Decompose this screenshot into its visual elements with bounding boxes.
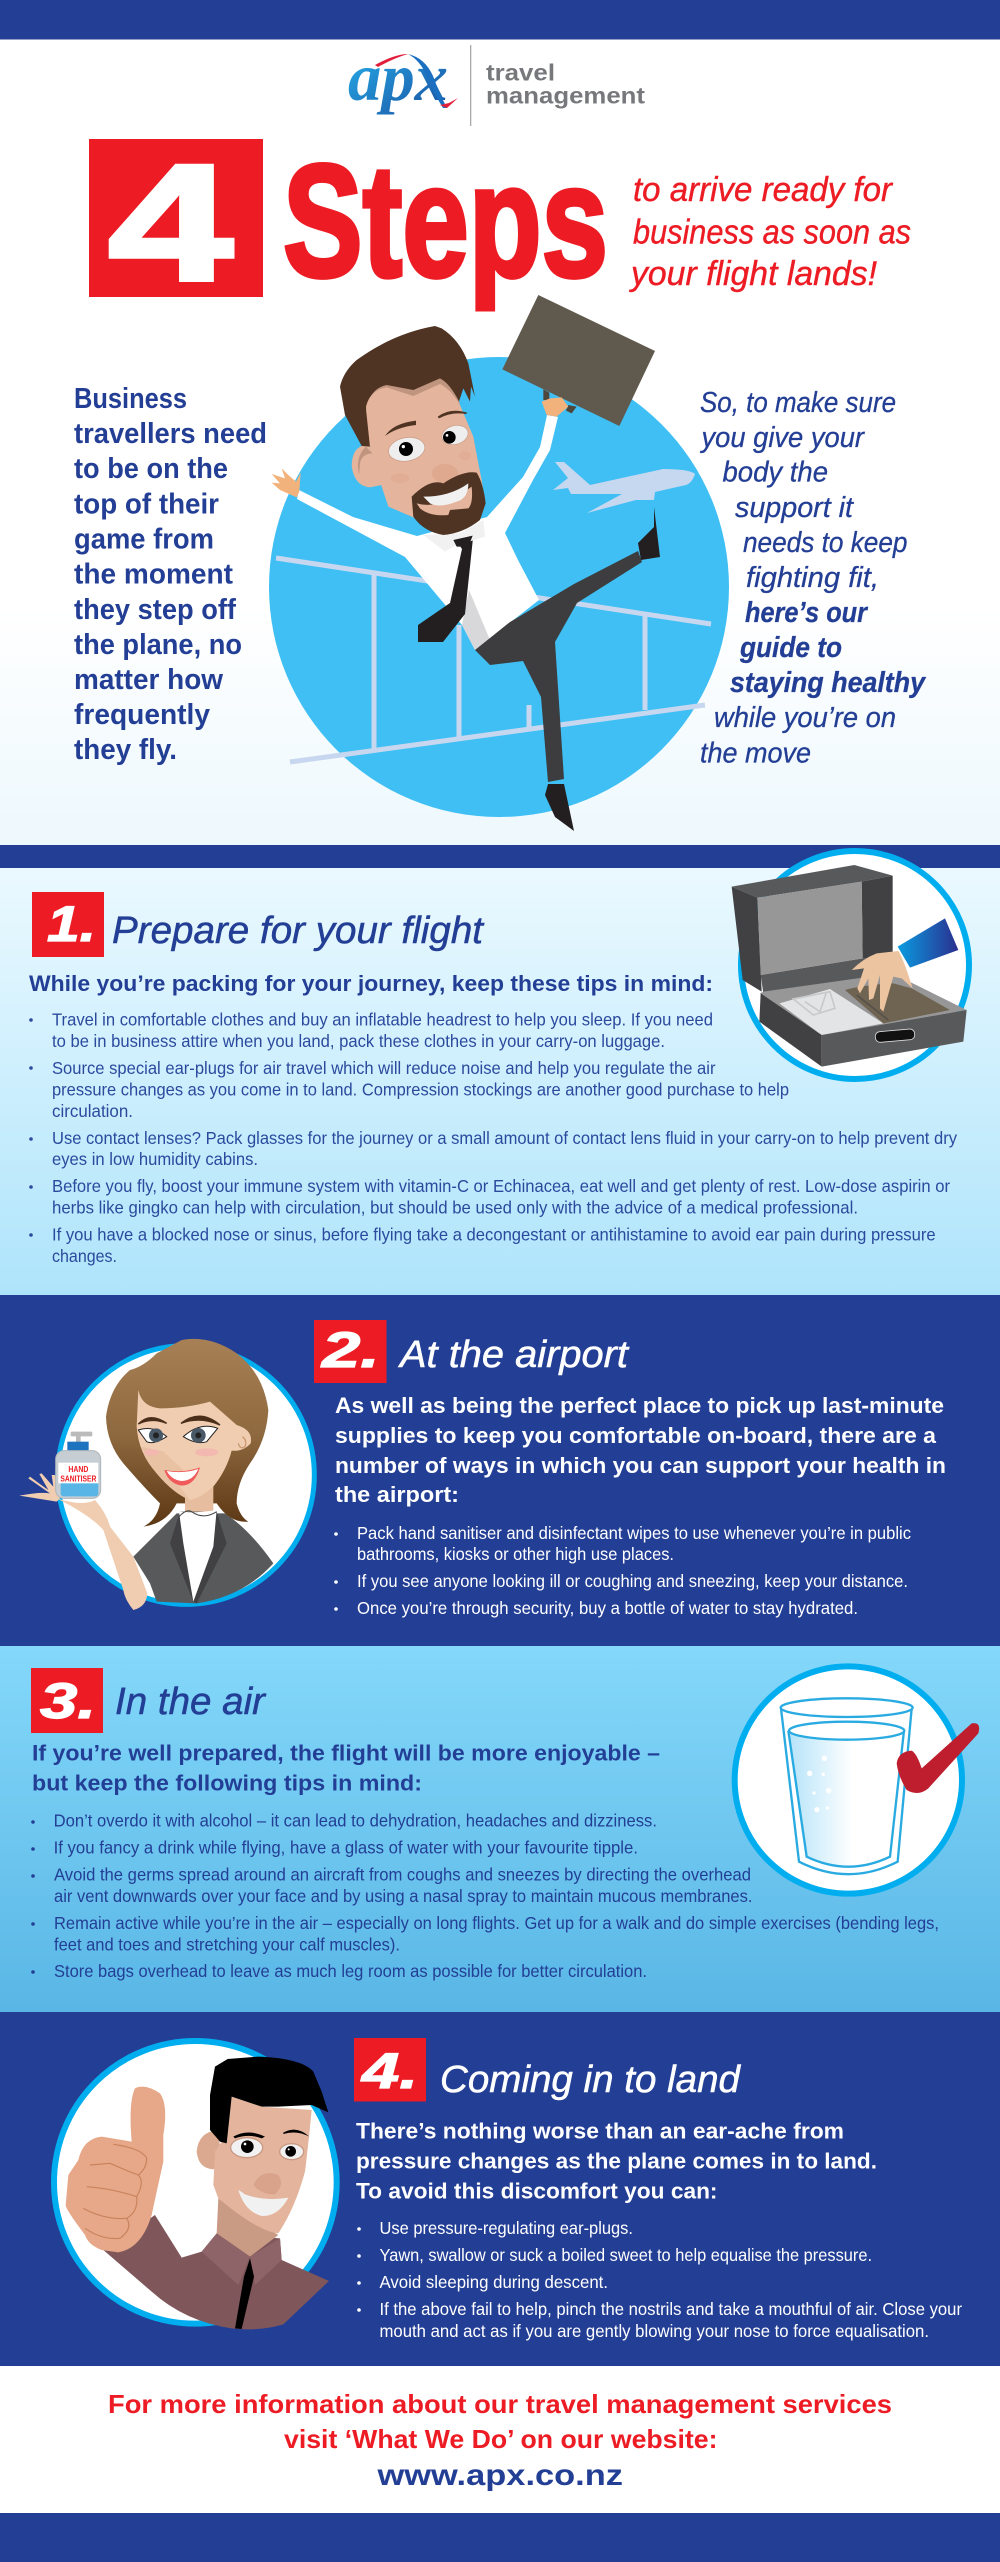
head and briefcase, traced at 3x (272, 295, 655, 552)
intro text: right: you give your (700, 422, 865, 454)
bullet list: Don’t overdo it with alcohol – it can lead to dehydration, headaches and dizziness. (54, 1811, 657, 1831)
intro text: right: the move (700, 738, 811, 770)
intro text: right: fighting fit, (746, 562, 879, 594)
number badge 2 (314, 1320, 386, 1383)
intro text: right: support it (735, 492, 855, 524)
bullet list: Once you’re through security, buy a bottle of water to stay hydrated. (357, 1598, 858, 1618)
intro text: right: here’s our (745, 597, 868, 629)
bottom band (0, 2513, 1000, 2562)
tagline: business as soon as (633, 214, 911, 252)
bullet list: Remain active while you’re in the air – especially on long flights. Get up for a walk and do simple exercises (bending legs, (54, 1913, 939, 1933)
tagline: your flight lands! (629, 255, 878, 293)
heading: coming in to land: Coming in to land (440, 2059, 742, 2101)
subheading: If you’re well prepared, the flight will be more enjoyable – (32, 1741, 660, 1766)
intro text: left: they fly. (74, 734, 177, 766)
subheading (356, 2118, 877, 2203)
bullet list: Use contact lenses? Pack glasses for the journey or a small amount of contact lens fluid in your carry-on to help prevent dry (52, 1128, 957, 1148)
bullet list (31, 1811, 939, 1981)
title: 4 Steps (89, 131, 608, 316)
bullet list: If the above fail to help, pinch the nostrils and take a mouthful of air. Close your (380, 2299, 962, 2319)
bullet list: bathrooms, kiosks or other high use places. (357, 1544, 674, 1564)
panel: step 4 coming in to land (0, 2012, 1000, 2366)
illustration: man with thumbs up (54, 2041, 337, 2329)
bullet list: Pack hand sanitiser and disinfectant wipes to use whenever you’re in public (357, 1523, 911, 1543)
subheading: pressure changes as the plane comes in to land. (356, 2148, 877, 2174)
title: 4 Steps: Steps (283, 131, 608, 310)
bullet list: If you fancy a drink while flying, have a glass of water with your favourite tipple. (54, 1838, 638, 1858)
bullet list: circulation. (52, 1101, 133, 1121)
intro text: left: they step off (74, 594, 236, 626)
subheading: number of ways in which you can support your health in (335, 1453, 946, 1478)
bullet list: Store bags overhead to leave as much leg room as possible for better circulation. (54, 1961, 647, 1981)
bullet list: mouth and act as if you are gently blowing your nose to force equalisation. (380, 2321, 929, 2341)
subheading: There’s nothing worse than an ear-ache from (356, 2118, 844, 2144)
subheading: but keep the following tips in mind: (32, 1771, 422, 1796)
subheading: As well as being the perfect place to pick up last-minute (335, 1393, 944, 1418)
bullet list: Use pressure-regulating ear-plugs. (380, 2218, 633, 2238)
number badge 3 (31, 1668, 103, 1733)
panel: step 3 in the air (0, 1646, 1000, 2012)
intro text: right: while you’re on (714, 702, 896, 734)
bullet list: to be in business attire when you land, pack these clothes in your carry-on luggage. (52, 1031, 665, 1051)
illustration: woman with hand sanitiser: SANITISER (60, 1474, 96, 1484)
bullet list: air vent downwards over your face and by using a nasal spray to maintain mucous membranes. (54, 1886, 752, 1906)
bullet list: Travel in comfortable clothes and buy an inflatable headrest to help you sleep. If you need (52, 1010, 713, 1030)
intro text: right: body the (722, 457, 828, 489)
top band of section 1 (0, 845, 1000, 868)
bullet list: pressure changes as you come in to land. Compression stockings are another good purchase to help (52, 1080, 789, 1100)
panel: step 2 at the airport (0, 1295, 1000, 1646)
number badge 1 (32, 892, 104, 957)
subheading: To avoid this discomfort you can: (356, 2178, 718, 2203)
bullet list (29, 1010, 957, 1266)
footer text (108, 2389, 892, 2454)
footer text: visit ‘What We Do’ on our website: (284, 2424, 718, 2454)
intro text: left: matter how (74, 664, 223, 696)
number badge 2: 2. (321, 1322, 380, 1378)
intro text: left (74, 383, 267, 766)
subheading: While you’re packing for your journey, keep these tips in mind: (29, 971, 713, 996)
bullet list: Avoid sleeping during descent. (380, 2272, 608, 2292)
logo: apx travel management: apx (348, 39, 448, 115)
subheading: the airport: (335, 1482, 459, 1507)
subheading (335, 1393, 946, 1507)
intro text: left: Business (74, 383, 187, 415)
intro text: right: needs to keep (743, 527, 908, 559)
illustration: woman with hand sanitiser (19, 1339, 314, 1610)
tagline (629, 171, 911, 293)
intro text: left: frequently (74, 699, 210, 731)
illustration: jumping businessman (269, 295, 729, 831)
illustration: glass of water with tick (735, 1666, 979, 1894)
intro text: left: top of their (74, 488, 219, 520)
bullet list (357, 2218, 962, 2341)
title: 4 Steps: 4 (108, 131, 233, 316)
bullet list: If you see anyone looking ill or coughing and sneezing, keep your distance. (357, 1571, 908, 1591)
bullet list: Yawn, swallow or suck a boiled sweet to help equalise the pressure. (380, 2245, 872, 2265)
panel: step 1 prepare for your flight (0, 851, 1000, 1295)
body (297, 415, 558, 650)
bullet list: If you have a blocked nose or sinus, before flying take a decongestant or antihistamine to avoid ear pain during pressure (52, 1225, 936, 1245)
panel: footer call to action (0, 2366, 1000, 2513)
bullet list: changes. (52, 1246, 117, 1266)
heading: prepare for your flight: Prepare for your flight (112, 910, 484, 952)
bullet list: herbs like gingko can help with circulation, but should be used only with the advice of a medical professional. (52, 1198, 858, 1218)
intro text: right: guide to (739, 632, 842, 664)
intro text: right (700, 387, 927, 770)
tagline: to arrive ready for (633, 171, 894, 209)
intro text: left: the plane, no (74, 629, 242, 661)
footer text: For more information about our travel management services (108, 2389, 892, 2419)
heading: in the air: In the air (115, 1681, 266, 1723)
logo: apx travel management: travel (486, 60, 555, 86)
bullet list (334, 1523, 911, 1618)
panel: header (0, 0, 1000, 845)
bullet list: feet and toes and stretching your calf muscles). (54, 1935, 400, 1955)
website url: www.apx.co.nz (376, 2459, 623, 2492)
illustration: open suitcase (732, 851, 969, 1079)
number badge 1: 1. (47, 896, 96, 952)
intro text: right: staying healthy (730, 667, 927, 699)
heading: at the airport: At the airport (398, 1334, 630, 1376)
logo: apx travel management (348, 39, 645, 126)
subheading: supplies to keep you comfortable on-board, there are a (335, 1423, 936, 1448)
bullet list: eyes in low humidity cabins. (52, 1149, 258, 1169)
number badge 4: 4. (361, 2043, 418, 2099)
subheading (32, 1741, 660, 1796)
intro text: left: the moment (74, 559, 233, 591)
number badge 4 (354, 2038, 426, 2102)
illustration: woman with hand sanitiser: HAND (68, 1464, 88, 1474)
bullet list: Avoid the germs spread around an aircraft from coughs and sneezes by directing the overhead (54, 1865, 751, 1885)
number badge 3: 3. (40, 1673, 96, 1729)
intro text: right: So, to make sure (700, 387, 896, 419)
intro text: left: to be on the (74, 453, 228, 485)
bullet list: Source special ear-plugs for air travel which will reduce noise and help you regulate the air (52, 1058, 716, 1078)
intro text: left: game from (74, 524, 214, 556)
logo: apx travel management: management (486, 82, 645, 108)
intro text: left: travellers need (74, 418, 267, 450)
bullet list: Before you fly, boost your immune system with vitamin-C or Echinacea, eat well and get plenty of rest. Low-dose aspirin or (52, 1176, 950, 1196)
